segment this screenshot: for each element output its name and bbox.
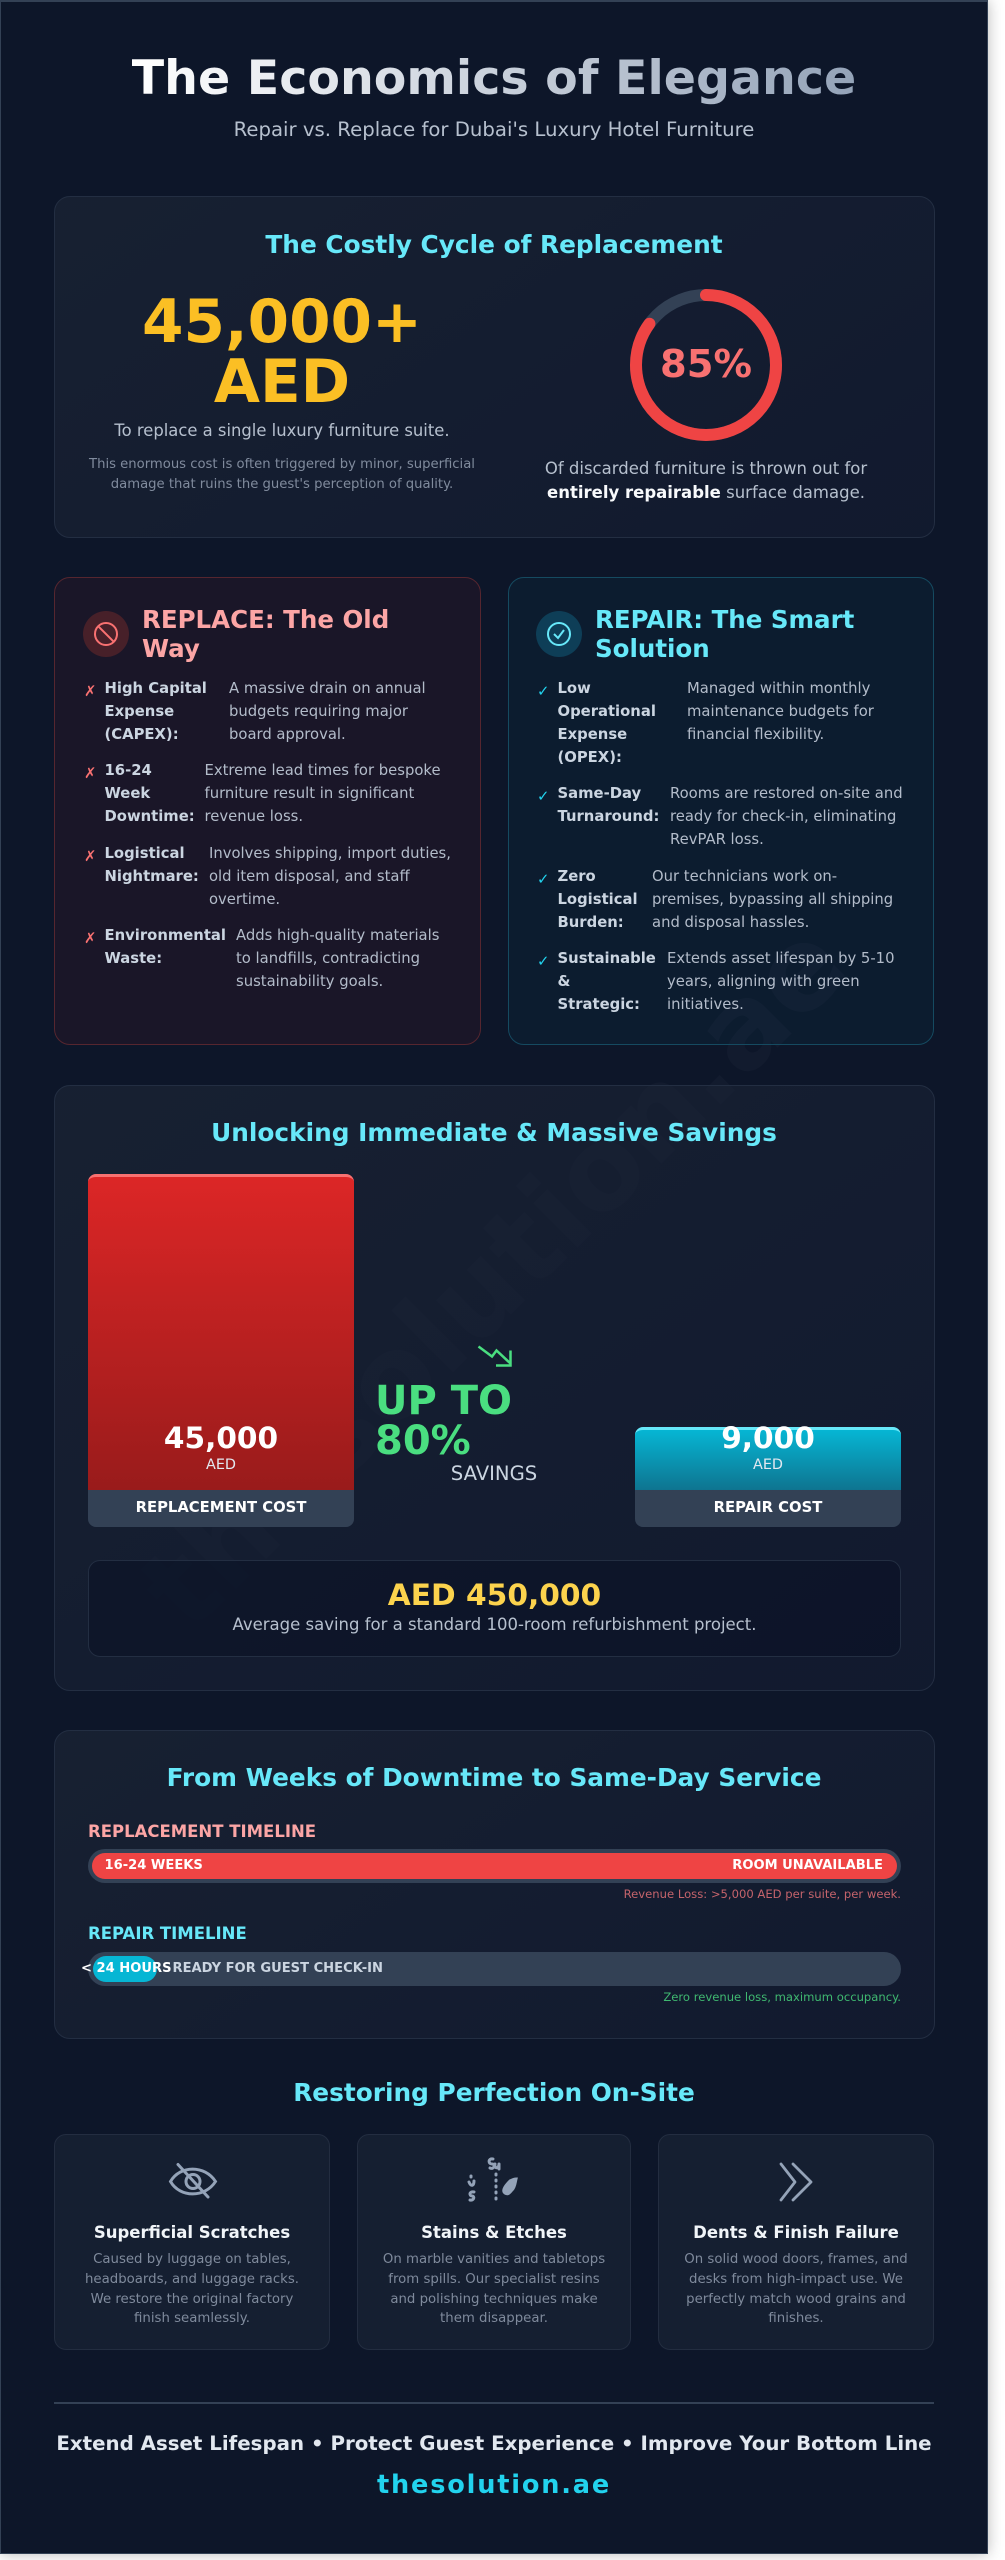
list item: waste: Environmental	[104, 927, 226, 944]
list item: downtime	[84, 762, 441, 825]
label: repair cost	[635, 1490, 901, 1527]
text: savings: SAVINGS	[451, 1462, 537, 1485]
card title: Superficial Scratches	[94, 2223, 290, 2242]
label: repair timeline: REPAIR TIMELINE	[88, 1924, 247, 1943]
list item: sustainable: initiatives.	[667, 996, 744, 1013]
panel: savings	[54, 1085, 935, 1691]
list item: downtime: Week	[104, 785, 150, 802]
list item: logistics: Nightmare:	[104, 868, 199, 884]
list item: logistics: overtime.	[209, 890, 280, 908]
list item: opex: (OPEX):	[558, 749, 622, 766]
heading: savings: Unlocking Immediate & Massive Savings	[211, 1118, 777, 1146]
list item: same-day: Turnaround:	[558, 808, 659, 825]
text: single suite cost: To replace a single luxury furniture suite.	[114, 421, 450, 440]
panel: repair	[508, 577, 934, 1045]
timeline: replacement	[88, 1849, 901, 1883]
icon: prohibited	[83, 611, 129, 657]
list item: sustainable: Strategic:	[558, 996, 640, 1013]
list item: opex: Low	[558, 680, 591, 697]
list item: same-day: Same-Day	[558, 785, 641, 802]
heading: repair	[595, 605, 854, 663]
list item: downtime: ✗	[84, 765, 96, 782]
chart: 85% donut	[630, 289, 782, 441]
list item: sustainable	[537, 950, 895, 1013]
bar text left: 16-24 WEEKS	[104, 1858, 203, 1873]
card description	[383, 2252, 605, 2326]
card description: and polishing techniques make	[390, 2292, 598, 2307]
unit: AED	[206, 1457, 236, 1473]
text: discarded furniture: Of discarded furniture is thrown out for	[545, 459, 867, 478]
panel: costly cycle of replacement	[54, 196, 935, 538]
list item: same-day	[537, 785, 903, 848]
card: stains	[357, 2134, 631, 2350]
icon: double chevron	[780, 2162, 812, 2202]
unit: AED	[753, 1457, 783, 1473]
heading: restoring perfection: Restoring Perfection On-Site	[293, 2078, 695, 2107]
bar: repair	[635, 1427, 901, 1490]
stat: AED 450,000: AED 450,000	[388, 1578, 601, 1613]
text: cost trigger note: damage that ruins the guest's perception of quality.	[111, 477, 453, 492]
panel: timelines	[54, 1730, 935, 2039]
list item: capex: (CAPEX):	[104, 726, 179, 743]
list item: waste: to landfills, contradicting	[236, 950, 420, 967]
list item: downtime: Downtime:	[104, 808, 195, 825]
label: replacement cost: REPLACEMENT COST	[136, 1499, 306, 1516]
list item: capex: High Capital	[104, 680, 207, 697]
subtitle: Repair vs. Replace for Dubai's Luxury Hotel Furniture	[234, 118, 754, 141]
bar text: ready: READY FOR GUEST CHECK-IN	[172, 1961, 383, 1976]
icon: eye off	[168, 2162, 218, 2199]
bar chart: replacement cost	[88, 1174, 354, 1527]
list item: zero logistics: Zero	[558, 868, 596, 885]
card description: them disappear.	[440, 2311, 548, 2326]
list item: zero logistics: premises, bypassing all shipping	[652, 891, 893, 908]
list item: zero logistics	[537, 868, 893, 931]
list item: sustainable: ✓	[537, 953, 549, 970]
label: replacement timeline: REPLACEMENT TIMELINE	[88, 1822, 316, 1841]
bar: 24 hours	[93, 1956, 157, 1982]
text: cost trigger note	[88, 457, 475, 492]
list item: opex	[537, 680, 874, 766]
list item: waste: sustainability goals.	[236, 973, 383, 990]
card description: We restore the original factory	[91, 2292, 293, 2307]
card description: finishes.	[768, 2311, 824, 2326]
list item: capex: board approval.	[229, 726, 346, 743]
list item: capex: budgets requiring major	[229, 703, 408, 720]
text: up to 80%: UP TO	[375, 1378, 512, 1424]
list item: opex: ✓	[537, 683, 549, 700]
list item: waste: Waste:	[104, 950, 162, 967]
list item: zero logistics: and disposal hassles.	[652, 914, 809, 931]
list item: zero logistics: ✓	[537, 871, 549, 888]
list item: zero logistics: Our technicians work on-	[652, 868, 837, 885]
heading: replace	[142, 605, 389, 663]
savings callout	[375, 1346, 537, 1485]
heading: repair: REPAIR: The Smart	[595, 605, 854, 634]
bar: replacement	[88, 1174, 354, 1490]
note: revenue loss: Revenue Loss: >5,000 AED per suite, per week.	[624, 1887, 901, 1901]
footer url: thesolution.ae	[377, 2470, 611, 2500]
text: cost trigger note: This enormous cost is often triggered by minor, superficial	[89, 457, 475, 472]
heading: costly cycle: The Costly Cycle of Replacement	[265, 230, 723, 259]
list item: sustainable: &	[558, 973, 570, 990]
panel: replace	[54, 577, 481, 1045]
list item: logistics	[84, 844, 451, 908]
heading: repair: Solution	[595, 634, 710, 663]
list item: downtime: furniture result in significant	[204, 785, 414, 802]
bar chart: repair cost	[635, 1421, 901, 1527]
timeline: repair	[88, 1952, 901, 1986]
list item: opex: Managed within monthly	[687, 680, 870, 697]
callout: 100-room saving	[88, 1560, 901, 1657]
icon: stains	[468, 2157, 518, 2202]
text: discarded furniture	[545, 459, 868, 502]
list item: zero logistics: Logistical	[558, 891, 638, 908]
list item: capex	[84, 680, 426, 743]
list item: same-day: ready for check-in, eliminating	[670, 808, 896, 825]
value: 45,000 AED: 45,000	[164, 1421, 278, 1455]
footer tagline: Extend Asset Lifespan • Protect Guest Experience • Improve Your Bottom Line	[56, 2432, 932, 2455]
value: 9,000 AED: 9,000	[721, 1421, 815, 1455]
list item: capex: ✗	[84, 683, 96, 700]
text: up to 80%	[375, 1378, 512, 1464]
note: zero revenue loss: Zero revenue loss, maximum occupancy.	[663, 1990, 901, 2004]
stat: 45,000+ AED: 45,000+	[142, 288, 422, 357]
bar: 16-24 weeks	[92, 1853, 897, 1879]
card description: Caused by luggage on tables,	[93, 2252, 291, 2267]
list item: downtime: 16-24	[104, 762, 152, 779]
list item: logistics: ✗	[84, 848, 96, 864]
list item: logistics: Logistical	[104, 844, 185, 862]
heading: replace: Way	[142, 634, 200, 663]
card description	[684, 2252, 908, 2326]
stat: 45,000+ AED	[142, 288, 422, 417]
list item: same-day: RevPAR loss.	[670, 831, 764, 848]
card description: finish seamlessly.	[134, 2311, 250, 2326]
card title: Stains & Etches	[421, 2223, 567, 2242]
card: dents	[658, 2134, 934, 2350]
list item: opex: Expense	[558, 726, 627, 743]
card title: Dents & Finish Failure	[693, 2223, 899, 2242]
card description: headboards, and luggage racks.	[85, 2272, 299, 2287]
list item: waste: Adds high-quality materials	[236, 927, 439, 944]
card: scratches	[54, 2134, 330, 2350]
stat: 85%: 85%	[660, 342, 752, 387]
list item: sustainable: Extends asset lifespan by 5-10	[667, 950, 895, 967]
label: replacement cost	[88, 1490, 354, 1527]
heading: replace: REPLACE: The Old	[142, 605, 389, 634]
icon: check circle	[536, 611, 582, 657]
list item: zero logistics: Burden:	[558, 914, 624, 931]
card description	[85, 2252, 299, 2326]
text: up to 80%: 80%	[375, 1418, 471, 1464]
list item: same-day: ✓	[537, 788, 549, 805]
icon: trending down arrow	[478, 1346, 512, 1367]
card description: desks from high-impact use. We	[689, 2272, 903, 2287]
list item: sustainable: Sustainable	[558, 950, 656, 967]
title: The Economics of Elegance	[132, 51, 856, 106]
list item: capex: Expense	[104, 703, 174, 720]
card description: On solid wood doors, frames, and	[684, 2252, 908, 2267]
list item: waste	[84, 927, 439, 990]
list item: capex: A massive drain on annual	[229, 680, 426, 697]
list item: logistics: old item disposal, and staff	[209, 868, 410, 884]
watermark: thesolution.ae: thesolution.ae	[115, 897, 873, 1655]
text: discarded furniture: entirely repairable surface damage.	[547, 483, 865, 502]
list item: sustainable: years, aligning with green	[667, 973, 860, 990]
text: average saving: Average saving for a standard 100-room refurbishment project.	[232, 1615, 756, 1634]
list item: same-day: Rooms are restored on-site and	[670, 785, 903, 802]
card description: perfectly match wood grains and	[686, 2292, 906, 2307]
label: repair cost: REPAIR COST	[714, 1499, 822, 1516]
list item: downtime: Extreme lead times for bespoke	[204, 762, 441, 779]
list item: waste: ✗	[84, 930, 96, 947]
card description: On marble vanities and tabletops	[383, 2252, 605, 2267]
bar text: 24 hours: < 24 HOURS	[81, 1961, 172, 1976]
list item: opex: Operational	[558, 703, 656, 720]
heading: timelines: From Weeks of Downtime to Same-Day Service	[167, 1763, 821, 1792]
bar text right: ROOM UNAVAILABLE	[732, 1858, 883, 1873]
list item: opex: maintenance budgets for	[687, 703, 874, 720]
list item: downtime: revenue loss.	[204, 808, 303, 825]
list item: logistics: Involves shipping, import duties,	[209, 844, 451, 862]
list item: opex: financial flexibility.	[687, 726, 824, 743]
stat: 45,000+ AED: AED	[214, 348, 350, 417]
card description: from spills. Our specialist resins	[388, 2272, 600, 2287]
